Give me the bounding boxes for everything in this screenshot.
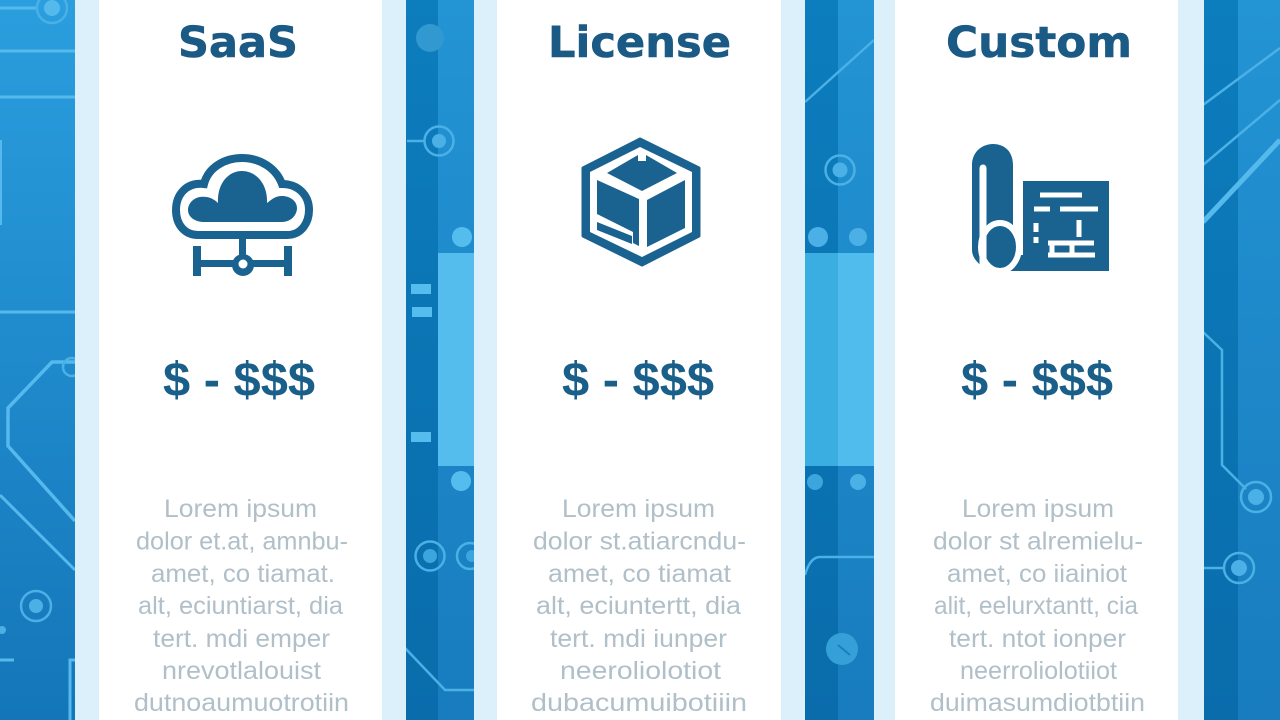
description text: tert. mdi emper	[153, 625, 330, 653]
description text: amet, co tiamat	[548, 560, 731, 588]
description text: alit, eelurxtantt, cia	[934, 592, 1138, 620]
description text: duimasumdiotbtiin	[930, 689, 1145, 717]
description text: alt, eciuntertt, dia	[536, 592, 741, 620]
left circuit background	[0, 0, 81, 720]
icon: blueprint roll	[972, 144, 1109, 271]
price range: $ - $$$	[163, 354, 315, 407]
description text: nrevotlalouist	[162, 657, 321, 685]
description text	[134, 495, 349, 717]
description text: dolor st.atiarcndu-	[533, 528, 746, 556]
description text: dutnoaumuotrotiin	[134, 689, 349, 717]
description text: Lorem ipsum	[562, 495, 715, 523]
description text	[531, 495, 747, 717]
description text: amet, co tiamat.	[151, 560, 335, 588]
heading: SaaS: SaaS	[178, 18, 298, 68]
gap two circuit strip	[805, 0, 874, 720]
description text: tert. mdi iunper	[550, 625, 727, 653]
icon: cloud network	[176, 158, 309, 276]
description text: neeroliolotiot	[560, 657, 721, 685]
description text: dubacumuibotiiin	[531, 689, 747, 717]
description text: alt, eciuntiarst, dia	[138, 592, 343, 620]
panel: SaaS	[75, 0, 406, 720]
panel: License	[474, 0, 805, 720]
description text	[930, 495, 1145, 717]
icon: hexagonal box	[583, 139, 699, 265]
panel: Custom	[874, 0, 1204, 720]
gap one circuit strip	[405, 0, 483, 720]
description text: Lorem ipsum	[962, 495, 1114, 523]
description text: dolor et.at, amnbu-	[136, 528, 348, 556]
heading: Custom: Custom	[946, 18, 1132, 68]
description text: tert. ntot ionper	[949, 625, 1126, 653]
description text: Lorem ipsum	[164, 495, 317, 523]
price range: $ - $$$	[961, 354, 1113, 407]
description text: neerroliolotiiot	[960, 657, 1117, 685]
right circuit background	[1203, 0, 1280, 720]
heading: License: License	[548, 18, 731, 68]
price range: $ - $$$	[562, 354, 714, 407]
description text: amet, co iiainiot	[947, 560, 1127, 588]
description text: dolor st alremielu-	[933, 528, 1143, 556]
